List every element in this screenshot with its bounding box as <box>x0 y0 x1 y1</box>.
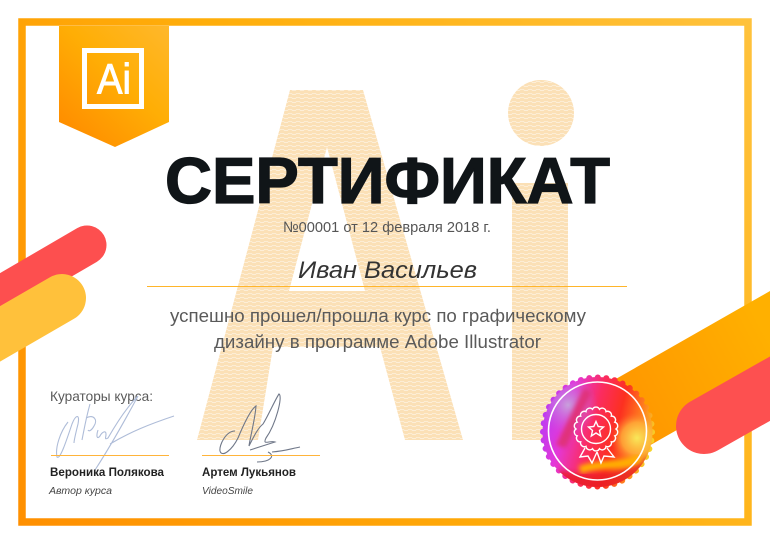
ribbon with Ai logo <box>59 26 169 147</box>
ribbon <box>59 26 169 147</box>
rosette inner circle <box>582 414 610 444</box>
course description <box>170 306 586 352</box>
logo box <box>84 50 142 106</box>
seal base <box>542 377 652 487</box>
curators heading: Кураторы курса: <box>50 388 153 404</box>
logo text: Ai <box>97 56 131 104</box>
description line 2: дизайну в программе Adobe Illustrator <box>214 332 541 352</box>
signature 2 <box>220 394 300 462</box>
title: СЕРТИФИКАТ <box>165 144 610 217</box>
seal highlights <box>546 382 652 487</box>
ribbon tails <box>580 448 614 463</box>
description line 1: успешно прошел/прошла курс по графическому <box>170 306 586 326</box>
star <box>588 422 604 436</box>
curator 2 <box>202 394 320 497</box>
curator 1 role: Автор курса <box>48 485 112 497</box>
certificate number: №00001 от 12 февраля 2018 г. <box>283 219 491 236</box>
curator 1 <box>48 396 174 497</box>
scalloped edge <box>543 378 652 486</box>
curator 2 name: Артем Лукьянов <box>202 467 296 479</box>
rosette <box>574 407 618 451</box>
curator 1 name: Вероника Полякова <box>50 467 165 479</box>
red stripe <box>704 366 770 426</box>
yellow stripe <box>0 298 62 357</box>
right stripes <box>600 291 770 451</box>
seal <box>542 377 655 500</box>
orange stripe <box>600 291 770 451</box>
red stripe <box>0 245 87 319</box>
award icon <box>574 407 618 463</box>
watermark letter A <box>197 90 463 440</box>
left stripes <box>0 245 87 357</box>
signature 1 <box>57 396 174 470</box>
watermark letter i <box>508 80 574 440</box>
signature line 1 <box>51 455 169 456</box>
recipient name: Иван Васильев <box>298 257 477 284</box>
curator 2 role: VideoSmile <box>202 485 253 497</box>
signature line 2 <box>202 455 320 456</box>
inner ring <box>548 382 646 480</box>
name underline <box>147 286 627 287</box>
watermark: Ai <box>197 80 574 440</box>
